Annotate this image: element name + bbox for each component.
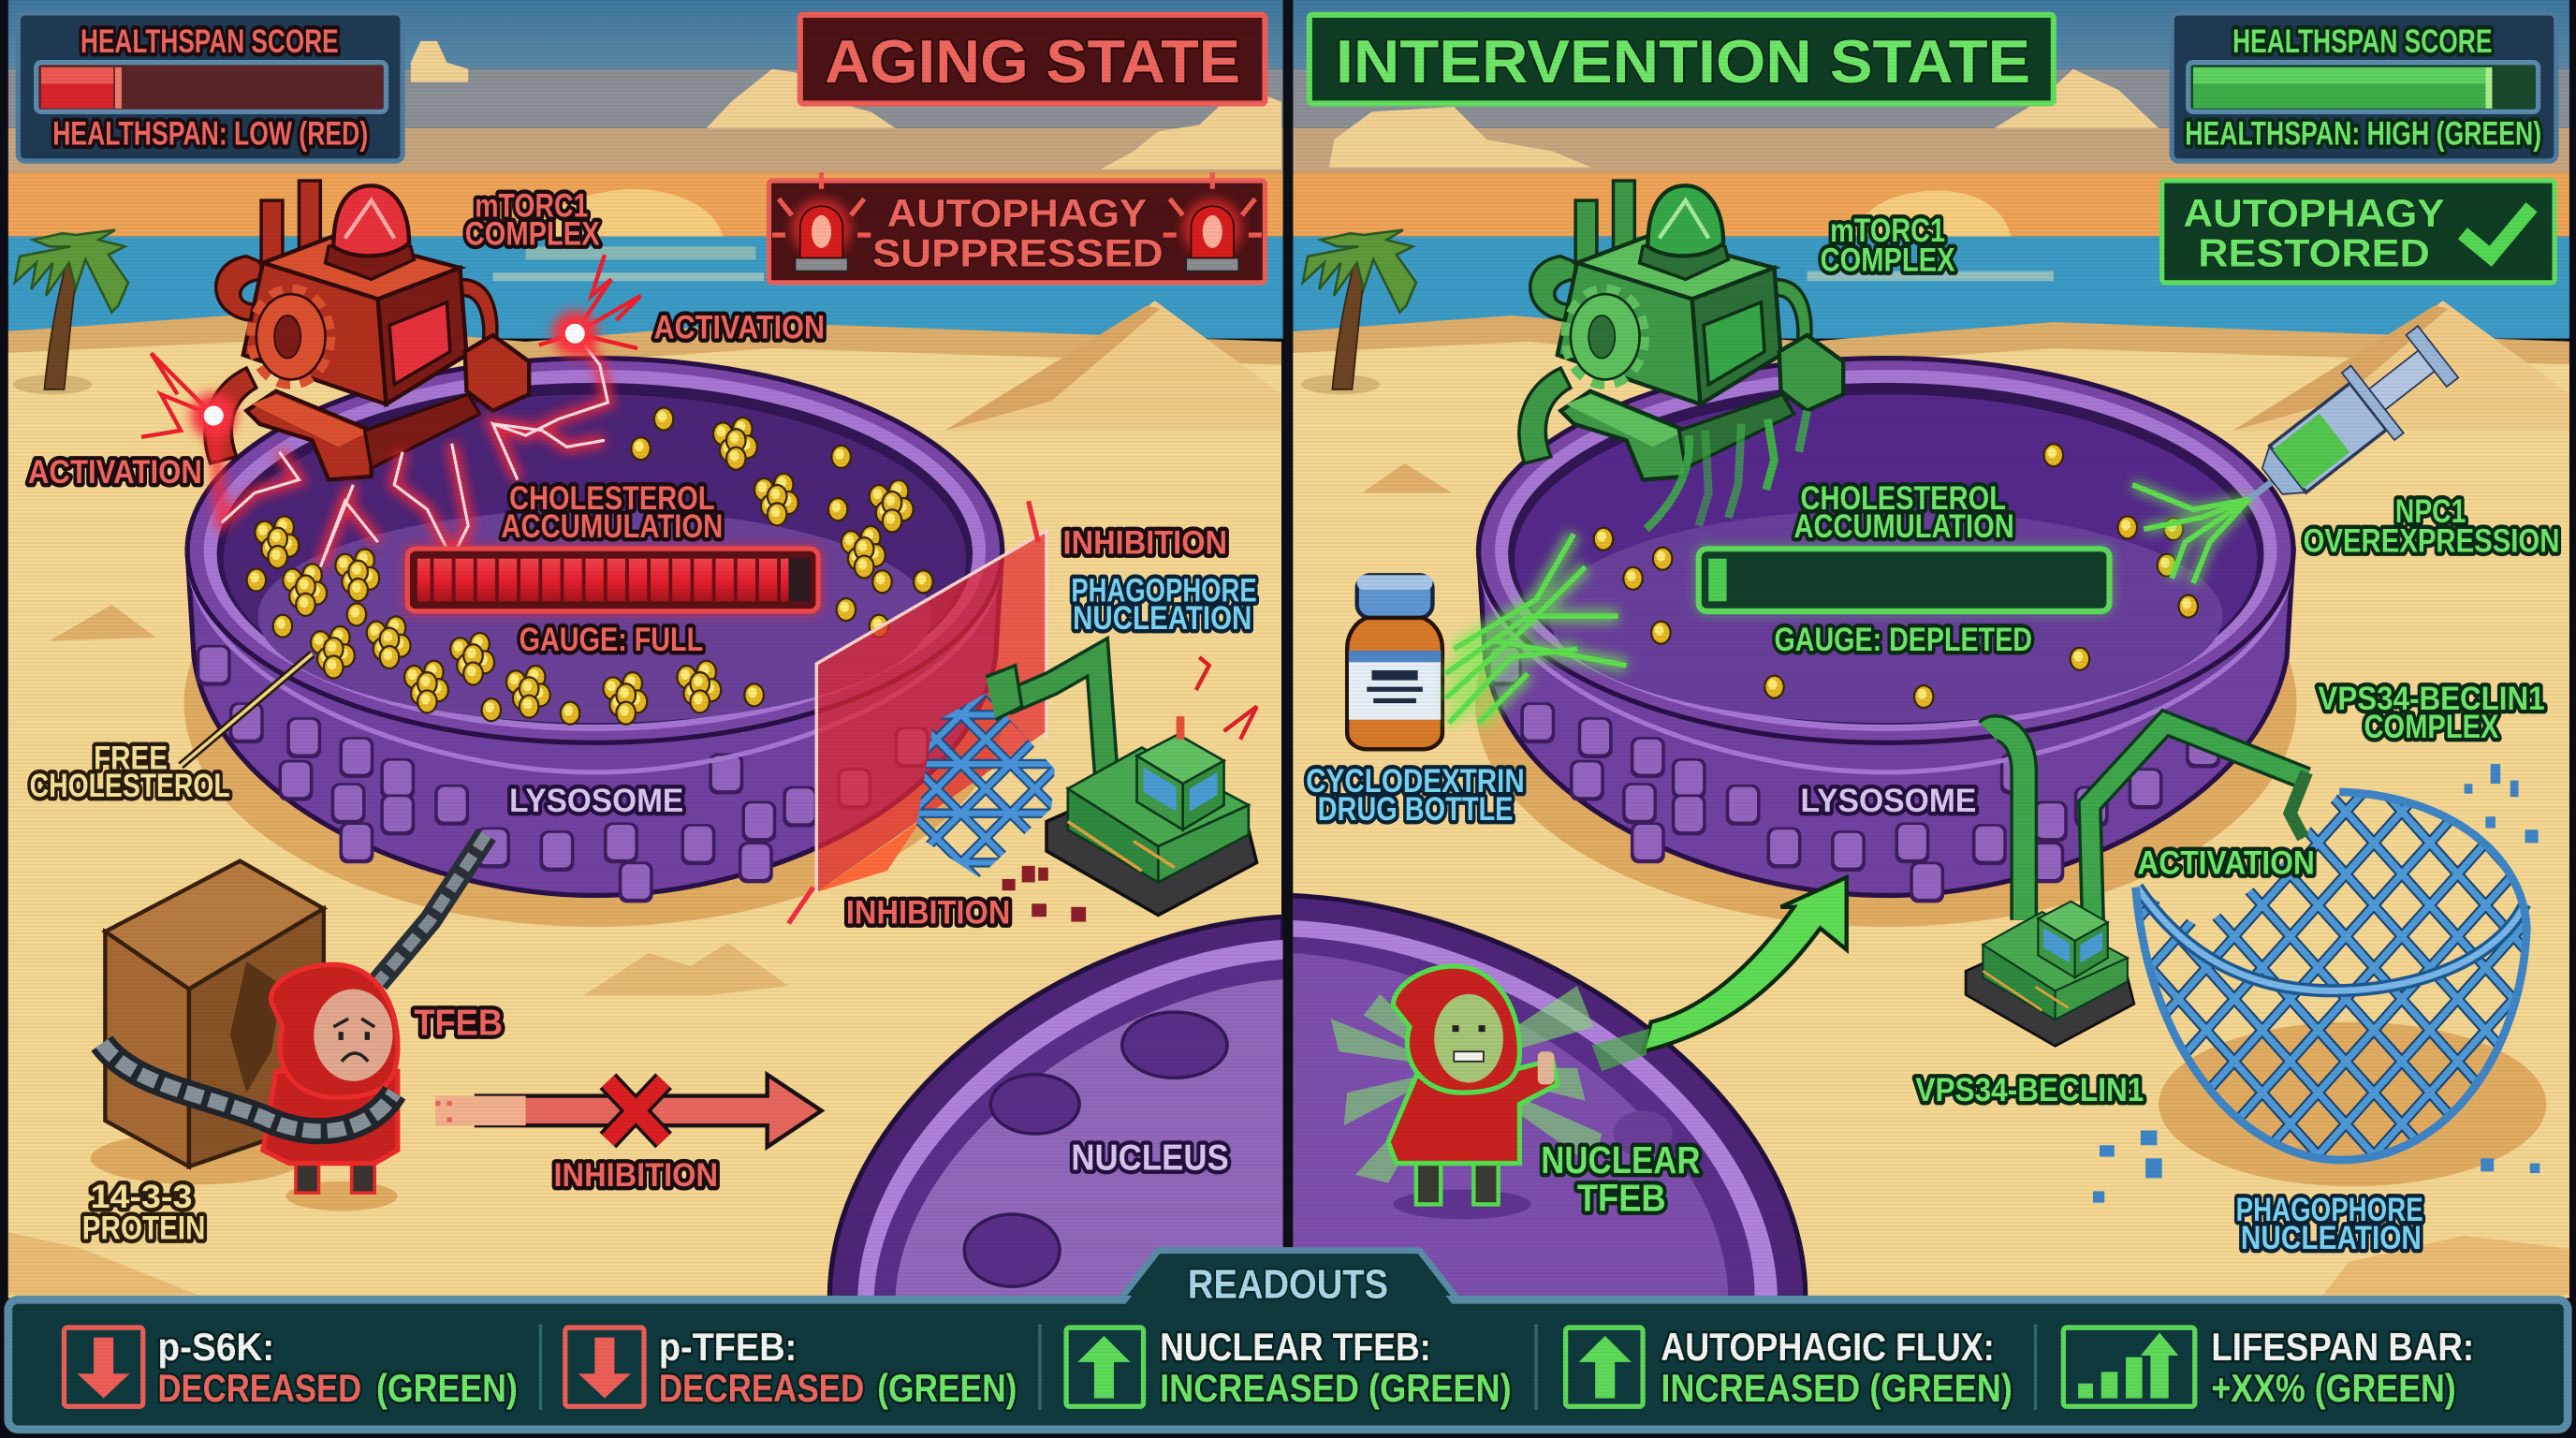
label: NPC1 overexpression: NPC1 xyxy=(2395,493,2466,530)
readout: autophagic flux xyxy=(1566,1325,2012,1410)
label: cyclodextrin drug bottle: DRUG BOTTLE xyxy=(1318,791,1513,828)
label: phagophore nucleation: NUCLEATION xyxy=(2241,1220,2422,1256)
readout: p-S6K: DECREASED xyxy=(158,1366,361,1410)
chain: anchor xyxy=(378,835,487,983)
healthspan status: HEALTHSPAN: LOW (RED) xyxy=(52,115,368,152)
arrow: blocked translocation xyxy=(435,1075,822,1147)
center divider xyxy=(1283,0,1293,1298)
label: TFEB: TFEB xyxy=(414,1004,503,1044)
label: cholesterol accumulation xyxy=(501,480,723,545)
arrow: TFEB translocation xyxy=(1592,877,1847,1071)
banner: autophagy restored: AUTOPHAGY xyxy=(2183,191,2445,235)
tentacles: machine drips xyxy=(1647,411,1808,529)
label: cyclodextrin drug bottle xyxy=(1306,763,1525,828)
gauge: full xyxy=(404,546,822,614)
scene background: aging panel xyxy=(0,0,1298,1314)
readout: lifespan bar: +XX% (GREEN) xyxy=(2211,1366,2456,1410)
chain links: anchor xyxy=(378,835,487,983)
label: phagophore nucleation: PHAGOPHORE xyxy=(2236,1192,2423,1228)
icon: check mark xyxy=(2463,207,2532,257)
title: intervention state: INTERVENTION STATE xyxy=(1336,27,2030,95)
label: mTORC1 complex: COMPLEX xyxy=(1821,242,1955,279)
label: VPS34-Beclin1: VPS34-BECLIN1 xyxy=(1915,1072,2144,1108)
readout: p-TFEB: p-TFEB: xyxy=(659,1325,797,1369)
readout: p-TFEB xyxy=(565,1325,1017,1410)
title: aging state: AGING STATE xyxy=(825,27,1240,95)
machine: mTORC1 green xyxy=(1519,181,1843,479)
label: phagophore nucleation: NUCLEATION xyxy=(1073,600,1251,637)
excavator: VPS34-Beclin1 active xyxy=(1966,723,2306,1046)
gauge: depleted xyxy=(1695,546,2113,614)
label: NPC1 overexpression xyxy=(2304,493,2559,560)
readout: p-S6K xyxy=(65,1325,518,1410)
spray: NPC1 xyxy=(2132,485,2249,583)
excavator: VPS34 aging xyxy=(986,657,1257,916)
scene background: intervention panel xyxy=(1288,0,2576,1314)
label: cholesterol accumulation: ACCUMULATION xyxy=(1794,508,2014,545)
readout: nuclear TFEB: NUCLEAR TFEB: xyxy=(1160,1325,1431,1369)
label: phagophore nucleation xyxy=(1071,572,1257,637)
readout: autophagic flux: AUTOPHAGIC FLUX: xyxy=(1661,1325,1995,1369)
healthspan heading: HEALTHSPAN SCORE xyxy=(2232,23,2492,60)
fragments: net particles xyxy=(2093,764,2539,1203)
readout: lifespan bar: LIFESPAN BAR: xyxy=(2211,1325,2474,1369)
label: activation right: ACTIVATION xyxy=(654,310,825,346)
healthspan bar xyxy=(2188,63,2539,111)
label: free cholesterol: CHOLESTEROL xyxy=(30,768,230,804)
label: cholesterol accumulation xyxy=(1794,480,2014,545)
label: free cholesterol: FREE xyxy=(94,740,168,776)
spray: cyclodextrin xyxy=(1445,534,1627,723)
net: phagophore nucleation xyxy=(2136,792,2546,1186)
readout: nuclear TFEB: INCREASED (GREEN) xyxy=(1160,1366,1512,1410)
readout: nuclear TFEB xyxy=(1066,1325,1512,1410)
label: inhibition barrier: INHIBITION xyxy=(846,894,1010,931)
label: VPS34-Beclin1 complex: VPS34-BECLIN1 xyxy=(2318,681,2545,717)
label: inhibition arrow: INHIBITION xyxy=(554,1157,718,1194)
label: mTORC1 complex: mTORC1 xyxy=(475,188,588,225)
readout: p-S6K: p-S6K: xyxy=(158,1325,274,1369)
healthspan bar xyxy=(37,63,386,111)
label: cholesterol accumulation: ACCUMULATION xyxy=(501,508,723,545)
label: VPS34-Beclin1 complex xyxy=(2318,681,2545,745)
banner: autophagy restored xyxy=(2162,181,2554,283)
label: 14-3-3 protein: PROTEIN xyxy=(82,1210,205,1246)
label: activation left: ACTIVATION xyxy=(28,454,202,491)
label: cyclodextrin drug bottle: CYCLODEXTRIN xyxy=(1306,763,1525,800)
label: 14-3-3 protein xyxy=(82,1179,205,1246)
debris xyxy=(1003,866,1086,922)
banner: autophagy suppressed xyxy=(768,172,1265,283)
title: aging state xyxy=(800,15,1265,104)
readouts heading: READOUTS xyxy=(1188,1261,1388,1307)
label: nuclear TFEB: NUCLEAR xyxy=(1541,1138,1701,1181)
label: free cholesterol xyxy=(30,740,230,804)
character: nuclear TFEB xyxy=(1388,966,1558,1219)
label: lysosome: LYSOSOME xyxy=(1801,783,1976,819)
healthspan heading: HEALTHSPAN SCORE xyxy=(80,23,339,60)
label: mTORC1 complex: COMPLEX xyxy=(465,215,600,252)
label: mTORC1 complex xyxy=(1821,213,1955,279)
character: TFEB chained xyxy=(263,964,398,1211)
bottle: cyclodextrin xyxy=(1347,575,1442,749)
label: VPS34-Beclin1 complex: COMPLEX xyxy=(2364,709,2499,745)
chain links: body wrap xyxy=(102,1043,394,1131)
readout: lifespan bar xyxy=(2063,1325,2474,1410)
scaffold: phagophore fragment xyxy=(915,694,1055,877)
label: nucleus: NUCLEUS xyxy=(1071,1138,1229,1179)
healthspan panel: intervention xyxy=(2172,13,2556,161)
label: phagophore nucleation: PHAGOPHORE xyxy=(1071,572,1257,609)
banner: autophagy suppressed: AUTOPHAGY xyxy=(887,191,1147,235)
panel: readouts xyxy=(8,1251,2568,1430)
label: cholesterol accumulation: CHOLESTEROL xyxy=(1801,480,2006,517)
label: 14-3-3 protein: 14-3-3 xyxy=(91,1179,192,1215)
label: phagophore nucleation xyxy=(2236,1192,2423,1256)
readout: p-TFEB: (GREEN) xyxy=(877,1366,1017,1410)
cholesterol deposits: aging xyxy=(245,406,934,726)
label: nuclear TFEB xyxy=(1541,1138,1701,1219)
readout: p-S6K: (GREEN) xyxy=(376,1366,518,1410)
title: intervention state xyxy=(1310,15,2054,104)
lightning: activation xyxy=(141,255,641,566)
healthspan panel: aging xyxy=(18,13,402,161)
label: lysosome: LYSOSOME xyxy=(509,783,683,819)
barrier: inhibition wall xyxy=(788,501,1046,923)
label: nuclear TFEB: TFEB xyxy=(1577,1176,1666,1219)
label: mTORC1 complex: mTORC1 xyxy=(1830,213,1945,249)
machine: mTORC1 red xyxy=(205,181,529,479)
protein block: 14-3-3 xyxy=(91,861,324,1184)
cholesterol deposits: depleted xyxy=(1593,443,2199,709)
syringe: NPC1 xyxy=(2223,318,2465,533)
label: cholesterol accumulation: CHOLESTEROL xyxy=(509,480,714,517)
label: gauge depleted: GAUGE: DEPLETED xyxy=(1774,622,2032,658)
banner: autophagy suppressed: SUPPRESSED xyxy=(872,230,1164,274)
banner: autophagy restored: RESTORED xyxy=(2198,230,2430,274)
label: inhibition upper: INHIBITION xyxy=(1063,524,1227,561)
label: activation: ACTIVATION xyxy=(2137,845,2315,882)
rays: nuclear TFEB glow xyxy=(1331,986,1602,1183)
label: gauge full: GAUGE: FULL xyxy=(520,622,703,658)
chain: body wrap xyxy=(102,1043,394,1131)
readout: p-TFEB: DECREASED xyxy=(659,1366,864,1410)
readout: autophagic flux: INCREASED (GREEN) xyxy=(1661,1366,2012,1410)
label: mTORC1 complex xyxy=(465,188,600,252)
pointer: free cholesterol xyxy=(181,654,313,766)
